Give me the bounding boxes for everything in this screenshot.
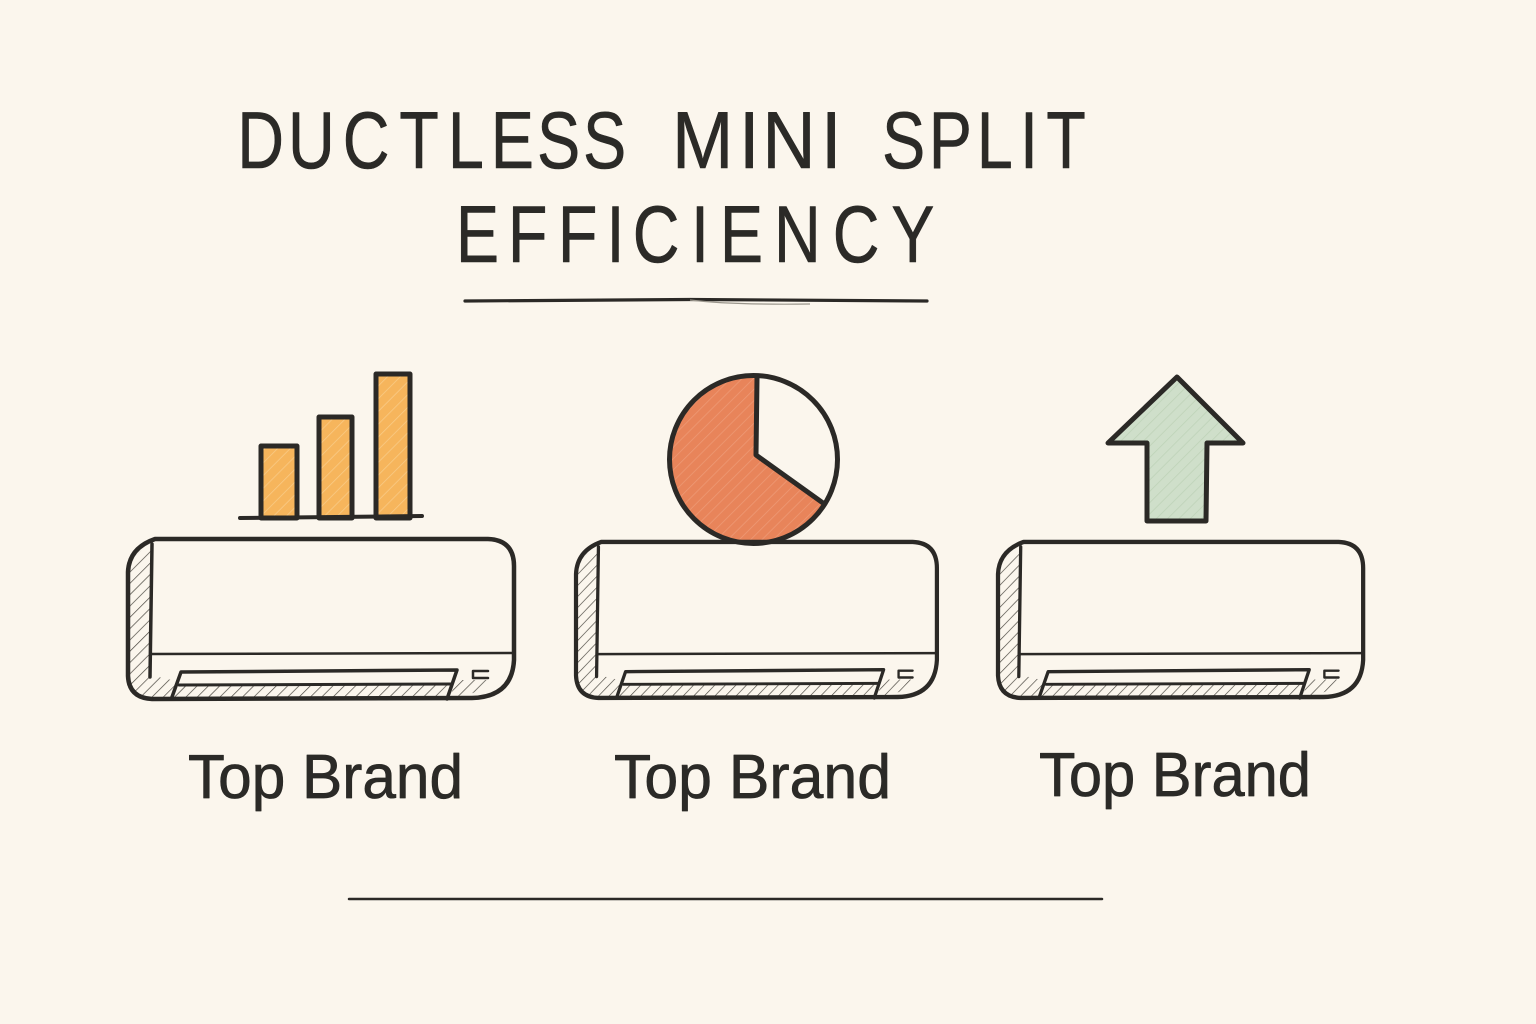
unit: first mini split (128, 539, 514, 699)
label: third brand: Top Brand (1039, 741, 1311, 810)
unit: third mini split (998, 542, 1363, 698)
title: DUCTLESS (237, 95, 626, 186)
unit: second mini split (576, 542, 937, 698)
title: MINI (672, 96, 841, 186)
icon: bar chart (240, 374, 422, 518)
title (237, 95, 1086, 280)
icon: pie chart (669, 376, 838, 544)
icon: up arrow (1108, 377, 1243, 521)
title underline (465, 300, 927, 304)
title: SPLIT (882, 95, 1086, 186)
title: EFFICIENCY (456, 189, 934, 280)
label: first brand: Top Brand (188, 743, 463, 812)
bottom rule (349, 898, 1102, 900)
label: second brand: Top Brand (614, 743, 891, 812)
